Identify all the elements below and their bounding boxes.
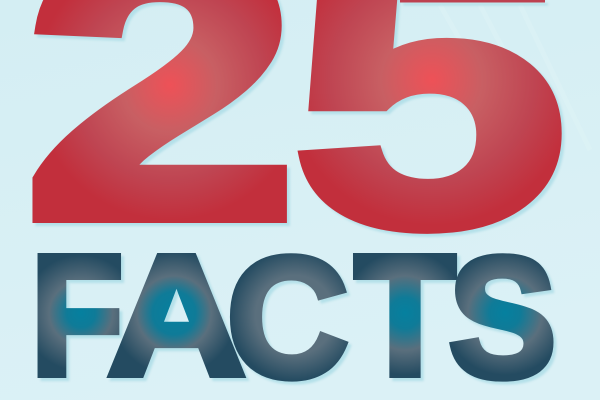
number 25: [26, 0, 568, 308]
digit 5 top bar edge: [400, 0, 545, 2]
word FACTS: [31, 221, 556, 400]
decorative rays: [440, 5, 590, 150]
